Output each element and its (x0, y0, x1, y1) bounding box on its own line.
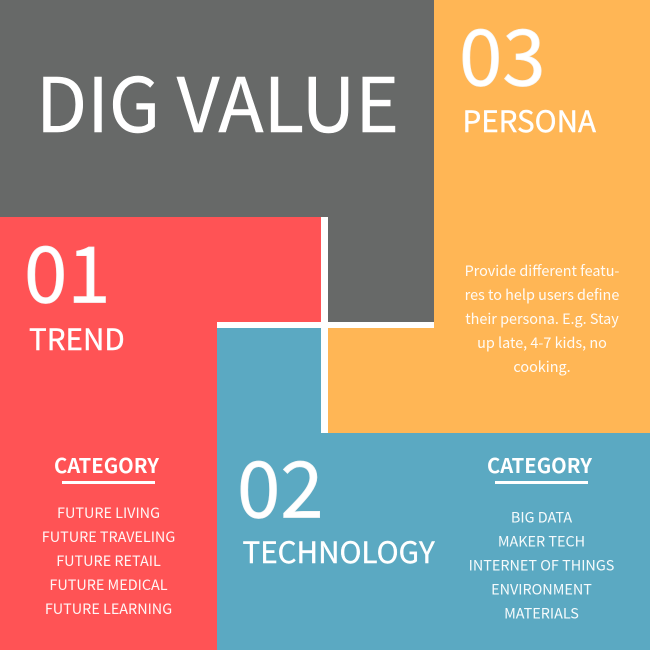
category list: INTERNET OF THINGS (469, 554, 614, 576)
category list: FUTURE TRAVELING (42, 526, 175, 547)
panel: dig value grey (0, 0, 434, 322)
number 02: 02 (237, 428, 324, 540)
category heading: CATEGORY (487, 450, 592, 479)
heading trend: TREND (29, 316, 125, 359)
panel: persona orange (328, 0, 650, 433)
category list: FUTURE RETAIL (56, 550, 161, 571)
persona description: their persona. E.g. Stay (465, 308, 619, 329)
section 01: trend (24, 214, 175, 619)
persona description (465, 260, 619, 377)
category list (469, 506, 614, 624)
category list: FUTURE LEARNING (45, 598, 172, 619)
persona description: cooking. (513, 356, 571, 377)
heading technology: TECHNOLOGY (242, 529, 435, 572)
section 02: technology (237, 428, 614, 624)
category underline (495, 481, 588, 484)
heading persona: PERSONA (462, 98, 596, 141)
category underline (62, 481, 155, 484)
category list: BIG DATA (511, 506, 572, 528)
category list: MAKER TECH (498, 530, 585, 552)
persona description: up late, 4-7 kids, no (477, 332, 607, 353)
category list: FUTURE MEDICAL (49, 574, 168, 595)
persona description: Provide different featu- (465, 260, 619, 281)
persona description: res to help users define (465, 284, 619, 305)
category list (42, 502, 175, 619)
title: DIG VALUE (36, 45, 399, 154)
number 01: 01 (24, 214, 111, 326)
panel: trend red (0, 217, 321, 650)
category list: MATERIALS (504, 602, 579, 624)
panel: technology blue (217, 328, 650, 650)
category heading: CATEGORY (54, 450, 159, 479)
section 03: persona (459, 0, 619, 377)
category list: FUTURE LIVING (57, 502, 160, 523)
category list: ENVIRONMENT (491, 578, 592, 600)
